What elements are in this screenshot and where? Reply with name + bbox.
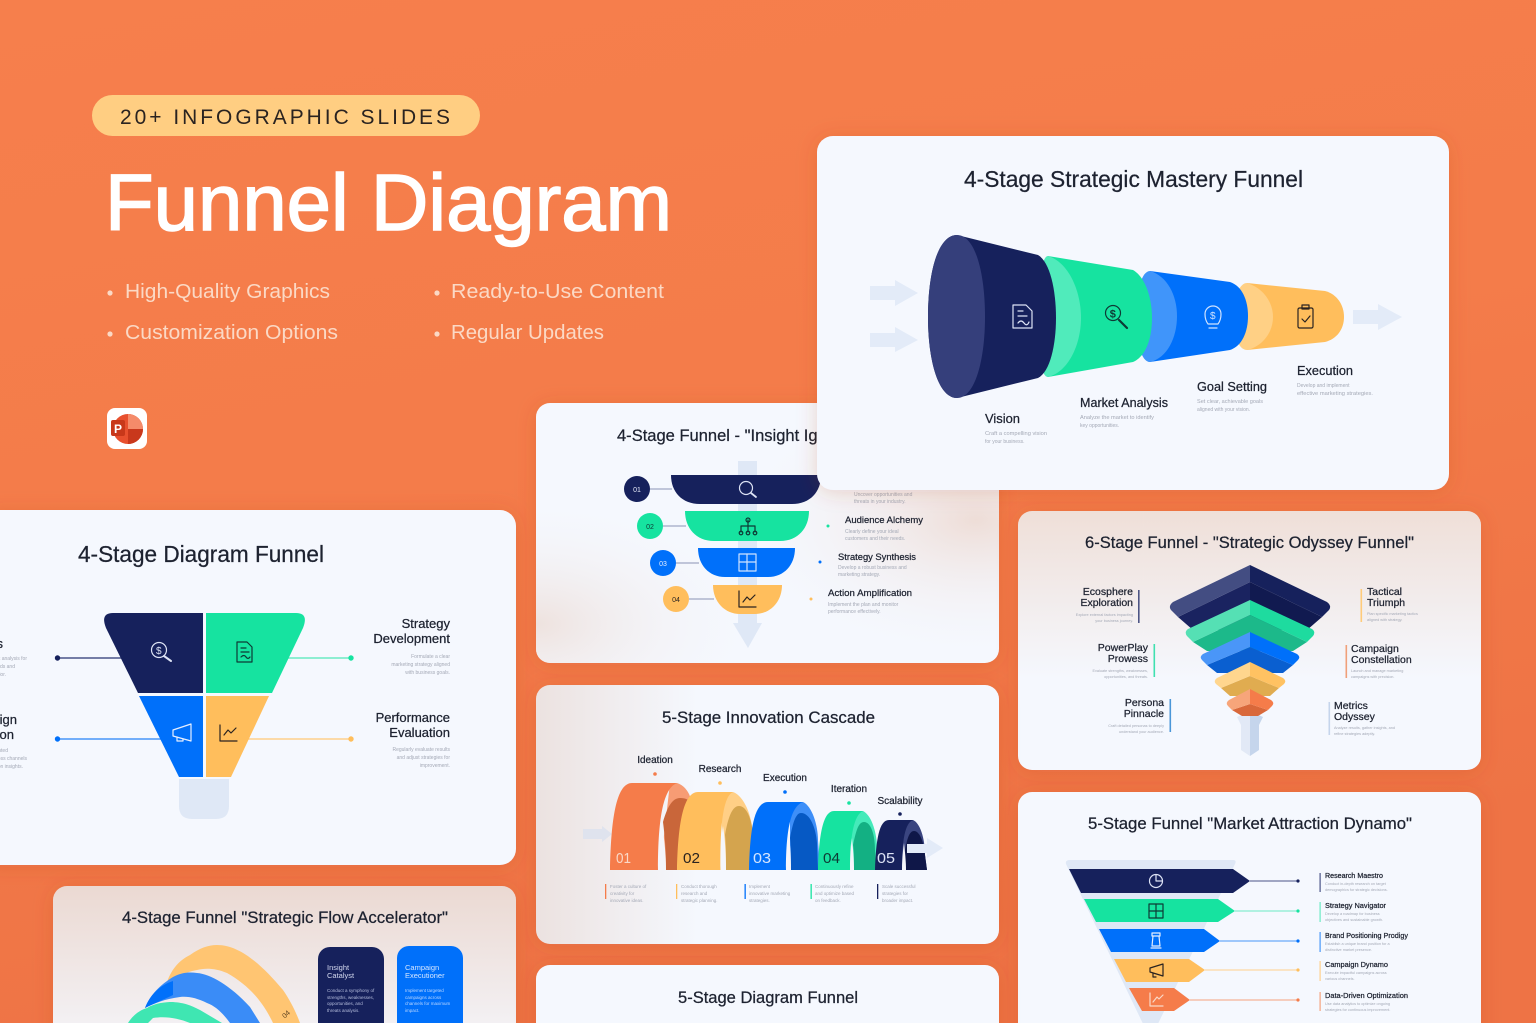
number circles: 02 (646, 524, 654, 531)
stage descriptions: broader impact. (882, 898, 913, 903)
arrow: input (583, 826, 612, 842)
stage labels: Strategy Synthesis (838, 552, 916, 563)
icon: bulb (1205, 306, 1221, 328)
panel: strategic mastery funnel (817, 136, 1449, 490)
card: insight catalyst: Catalyst (327, 971, 355, 980)
label: tactical triumph: Plan specific marketing tactics (1367, 612, 1418, 616)
label: campaign dynamo: Campaign Dynamo (1325, 960, 1388, 969)
label: execution: effective marketing strategies. (1297, 391, 1373, 397)
stage descriptions: strategies for (882, 891, 909, 896)
label: powerplay prowess: Prowess (1108, 653, 1148, 665)
label: strategy navigator: objectives and sustainable growth. (1325, 918, 1383, 922)
label: performance evaluation: and adjust strategies for (397, 755, 450, 761)
stage descriptions: strategic planning. (681, 898, 718, 903)
panel title: 5-Stage Diagram Funnel (678, 989, 858, 1007)
icons (739, 482, 757, 607)
arch numbers: 04 (823, 850, 840, 867)
funnel stage: navy (928, 235, 1056, 398)
label: goal setting: aligned with your vision. (1197, 407, 1250, 413)
chevron: green (1186, 600, 1314, 651)
icon: dollar magnifier (1106, 306, 1127, 328)
stage descriptions: innovative ideas. (610, 898, 644, 903)
feature list: High-Quality Graphics (125, 280, 330, 303)
connector lines (1190, 879, 1300, 1002)
label: brand positioning prodigy: Establish a unique brand position for a (1325, 942, 1390, 946)
panel: 5-stage diagram funnel (536, 965, 999, 1023)
label: metrics odyssey: Analyze results, gather insights, and (1334, 726, 1395, 730)
stage labels: customers and their needs. (845, 536, 905, 542)
icon: PowerPoint (107, 408, 147, 449)
label: ecosphere exploration: your business journey. (1095, 619, 1133, 623)
band: blue (1099, 929, 1220, 952)
label: campaign constellation: Campaign (1351, 643, 1399, 655)
icon: PowerPoint: P (114, 422, 122, 436)
label: execution: Develop and implement (1297, 383, 1350, 389)
arrow: output (907, 838, 943, 858)
label: campaign constellation: Launch and manage marketing (1351, 669, 1403, 673)
number circles: 04 (672, 597, 680, 604)
card: campaign executioner: Implement targeted (405, 988, 444, 993)
label: vision: for your business. (985, 439, 1024, 445)
card: insight catalyst: Conduct a symphony of (327, 988, 375, 993)
panel: innovation cascade (536, 685, 999, 944)
band: navy (1069, 869, 1250, 893)
label: campaign dynamo (1320, 960, 1388, 981)
label: research maestro: Research Maestro (1325, 871, 1383, 880)
icon: line chart (220, 725, 237, 741)
panel title: 4-Stage Funnel "Strategic Flow Accelerator" (122, 909, 448, 927)
label: persona pinnacle: understand your audience. (1119, 730, 1164, 734)
arch numbers (616, 850, 895, 867)
label: persona pinnacle: Persona (1125, 697, 1164, 709)
stage labels: Iteration (831, 784, 867, 795)
label: metrics odyssey: Metrics (1334, 700, 1368, 712)
number circles: 01 (633, 487, 641, 494)
card: campaign executioner: campaigns across (405, 995, 442, 1000)
panel title: 4-Stage Funnel - "Insight Ignition Funnel" (617, 426, 918, 445)
label: market analysis: Analyze the market to identify (1080, 415, 1155, 421)
label: strategy navigator (1320, 901, 1386, 922)
arch: orange (610, 783, 692, 870)
vertical arrow (733, 461, 762, 648)
label: metrics odyssey: refine strategies adeptly. (1334, 732, 1375, 736)
stage labels: Audience Alchemy (845, 515, 923, 526)
panel title: 5-Stage Funnel "Market Attraction Dynamo" (1088, 815, 1412, 833)
stage descriptions: Continuously refine (815, 884, 854, 889)
panel: strategic flow accelerator (53, 886, 516, 1023)
funnel segment: blue (139, 696, 203, 777)
stage descriptions: on feedback. (815, 898, 841, 903)
label: performance evaluation: Performance (376, 710, 450, 725)
label: brand positioning prodigy: Brand Positioning Prodigy (1325, 931, 1408, 940)
stage descriptions: and optimize based (815, 891, 855, 896)
label: campaign constellation: campaigns with precision. (1351, 675, 1394, 679)
funnel segment: navy (104, 613, 203, 693)
stage labels: Research (699, 764, 741, 775)
feature list: Customization Options (125, 321, 338, 344)
ring: yellow (167, 945, 300, 1023)
chevron: yellow (1215, 662, 1285, 696)
funnel segment: yellow (206, 696, 269, 777)
label: execution (1297, 363, 1373, 397)
label: strategy navigator: Strategy Navigator (1325, 901, 1386, 910)
label: metrics odyssey (1328, 700, 1395, 736)
panel: strategic odyssey funnel (1018, 511, 1481, 770)
card: campaign executioner: impact. (405, 1008, 420, 1013)
band: orange (1129, 988, 1190, 1011)
label: ecosphere exploration: Exploration (1080, 597, 1133, 609)
arch numbers: 05 (877, 850, 895, 867)
icon: document (237, 642, 252, 662)
label: market analysis: key opportunities. (1080, 423, 1119, 429)
stage 3 bowl (698, 548, 795, 577)
number circles: 03 (659, 561, 667, 568)
output arrow (1353, 304, 1402, 330)
label: strategy development: Development (373, 631, 450, 646)
stage descriptions: strategies. (749, 898, 770, 903)
stage labels (810, 492, 923, 615)
label: strategy development: with business goals. (405, 670, 450, 676)
icon: dollar magnifier: $ (1110, 308, 1116, 320)
label: vision: Vision (985, 411, 1020, 426)
chevron: blue (1201, 632, 1299, 673)
badge: 20+ infographic slides (92, 95, 480, 136)
card: insight catalyst (318, 947, 384, 1023)
number circles (624, 476, 689, 612)
input arrows (870, 280, 918, 352)
ring number: 04 (281, 1010, 292, 1020)
title: Funnel Diagram (105, 158, 672, 247)
label: vision: Craft a compelling vision (985, 431, 1047, 437)
stage labels: threats in your industry. (854, 499, 906, 505)
label: powerplay prowess: opportunities, and threats. (1104, 675, 1148, 679)
label: execution: Execution (1297, 363, 1353, 378)
arch numbers: 02 (683, 850, 700, 867)
stage descriptions: Foster a culture of (610, 884, 647, 889)
label: tactical triumph (1360, 586, 1418, 622)
stage descriptions: research and (681, 891, 708, 896)
card: campaign executioner: Executioner (405, 971, 445, 980)
stage 2 bowl (685, 511, 809, 541)
label: strategy development (373, 616, 450, 676)
label: powerplay prowess (1092, 642, 1155, 679)
card: insight catalyst: Insight (327, 963, 350, 972)
label: ecosphere exploration: Ecosphere (1083, 586, 1133, 598)
stage labels: Clearly define your ideal (845, 529, 899, 535)
label: performance evaluation: Evaluation (389, 725, 450, 740)
funnel stage: green (1038, 256, 1152, 377)
stage labels: marketing strategy. (838, 572, 880, 578)
stage labels: Ideation (637, 755, 673, 766)
label: data-driven optimization: Data-Driven Optimization (1325, 991, 1408, 1000)
card: insight catalyst: strengths, weaknesses, (327, 995, 374, 1000)
panel: market attraction dynamo (1018, 792, 1481, 1023)
stage 4 bowl (713, 585, 782, 614)
label: tactical triumph: Triumph (1367, 597, 1405, 609)
label: data-driven optimization (1320, 991, 1408, 1012)
label: market analysis: Market Analysis (1080, 395, 1168, 410)
label: persona pinnacle (1108, 697, 1171, 734)
arch: yellow (677, 792, 755, 870)
panel tint right (536, 403, 999, 663)
stage labels: Implement the plan and monitor (828, 602, 899, 608)
icon: clipboard (1298, 305, 1313, 328)
connector lines (55, 655, 354, 742)
label: persona pinnacle: Pinnacle (1124, 708, 1164, 720)
feature list (107, 280, 664, 344)
label: goal setting: Goal Setting (1197, 379, 1267, 394)
label: brand positioning prodigy (1320, 931, 1408, 952)
stage labels: Develop a robust business and (838, 565, 907, 571)
icon: dollar magnifier: $ (156, 646, 162, 657)
label: strategy navigator: Develop a roadmap for business (1325, 912, 1380, 916)
label: ecosphere exploration: Explore external factors impacting (1076, 613, 1133, 617)
ring: blue (145, 972, 260, 1023)
label: strategy development: Strategy (402, 616, 450, 631)
label: brand positioning prodigy: distinctive market presence. (1325, 948, 1372, 952)
label: performance evaluation (376, 710, 450, 769)
label: goal setting (1197, 379, 1267, 413)
connector lines (650, 489, 714, 599)
card: campaign executioner (397, 946, 463, 1023)
stage labels: performance effectively. (828, 609, 881, 615)
stage descriptions: Implement (749, 884, 771, 889)
label: left cut-off labels (0, 636, 27, 770)
label: tactical triumph: aligned with strategy. (1367, 618, 1402, 622)
chevron: navy (1170, 565, 1330, 630)
card: insight catalyst: threats analysis. (327, 1008, 360, 1013)
funnel stem (179, 779, 229, 819)
label: persona pinnacle: Craft detailed personas to deeply (1108, 724, 1164, 728)
label: campaign constellation (1346, 643, 1412, 679)
stage labels: Uncover opportunities and (854, 492, 913, 498)
funnel stage: yellow (1233, 283, 1344, 350)
ring: green (128, 1002, 222, 1023)
icon: megaphone (173, 724, 191, 741)
label: goal setting: Set clear, achievable goals (1197, 399, 1264, 405)
label: ecosphere exploration (1076, 586, 1140, 623)
label: performance evaluation: improvement. (420, 763, 450, 769)
label: research maestro: Conduct in-depth research on target (1325, 882, 1387, 886)
label: campaign constellation: Constellation (1351, 654, 1412, 666)
label: performance evaluation: Regularly evaluate results (392, 747, 450, 753)
feature list: Regular Updates (451, 321, 604, 344)
label: campaign dynamo: various channels. (1325, 977, 1355, 981)
arch: green (818, 811, 877, 870)
card: campaign executioner: channels for maximum (405, 1001, 451, 1006)
label: powerplay prowess: Evaluate strengths, weaknesses, (1092, 669, 1148, 673)
background funnel (1066, 860, 1236, 1023)
stage labels (637, 755, 923, 816)
label: campaign dynamo: Execute impactful campaigns across (1325, 971, 1387, 975)
label: research maestro (1320, 871, 1388, 892)
label: strategy development: marketing strategy aligned (391, 662, 450, 668)
label: tactical triumph: Tactical (1367, 586, 1402, 598)
funnel spout (1237, 711, 1263, 756)
stage labels: Action Amplification (828, 588, 912, 599)
icon: dollar magnifier (152, 642, 171, 661)
arch: navy (875, 820, 927, 870)
stage labels: Scalability (877, 796, 923, 807)
arch numbers: 03 (753, 850, 771, 867)
panel title: 5-Stage Innovation Cascade (662, 709, 875, 727)
stage descriptions: Conduct thorough (681, 884, 717, 889)
icons (1149, 874, 1163, 1006)
panel title: 4-Stage Strategic Mastery Funnel (964, 166, 1303, 192)
chevron: orange (1227, 689, 1273, 716)
stage descriptions: Scale successful (882, 884, 916, 889)
funnel segment: green (206, 613, 305, 693)
band: yellow (1114, 959, 1205, 982)
panel title: 6-Stage Funnel - "Strategic Odyssey Funnel" (1085, 534, 1414, 552)
label: data-driven optimization: Use data analytics to optimize ongoing (1325, 1002, 1390, 1006)
stage descriptions: creativity for (610, 891, 635, 896)
panel: insight ignition funnel (536, 403, 999, 663)
funnel stage: blue (1136, 271, 1248, 362)
card: insight catalyst: opportunities, and (327, 1001, 363, 1006)
panel: 4-stage diagram funnel (0, 510, 516, 865)
label: research maestro: demographics for strategic decisions. (1325, 888, 1388, 892)
label: data-driven optimization: strategies for continuous improvement. (1325, 1008, 1390, 1012)
panel tint left (536, 403, 999, 663)
stage descriptions: innovative marketing (749, 891, 791, 896)
panel title: 4-Stage Diagram Funnel (78, 541, 324, 567)
icon: document (1013, 305, 1032, 328)
stage labels: Execution (763, 773, 807, 784)
band: green (1084, 899, 1235, 922)
label: powerplay prowess: PowerPlay (1098, 642, 1149, 654)
icon: bulb: $ (1210, 311, 1216, 322)
stage 1 bowl (671, 475, 821, 504)
label: market analysis (1080, 395, 1168, 429)
arch numbers: 01 (616, 850, 631, 867)
badge: 20+ infographic slides: 20+ INFOGRAPHIC SLIDES (120, 106, 453, 129)
label: metrics odyssey: Odyssey (1334, 711, 1376, 723)
label: vision (985, 411, 1047, 445)
card: campaign executioner: Campaign (405, 963, 439, 972)
arch: blue (749, 802, 820, 870)
feature list: Ready-to-Use Content (451, 280, 664, 303)
stage descriptions (605, 884, 916, 903)
label: strategy development: Formulate a clear (411, 654, 450, 660)
